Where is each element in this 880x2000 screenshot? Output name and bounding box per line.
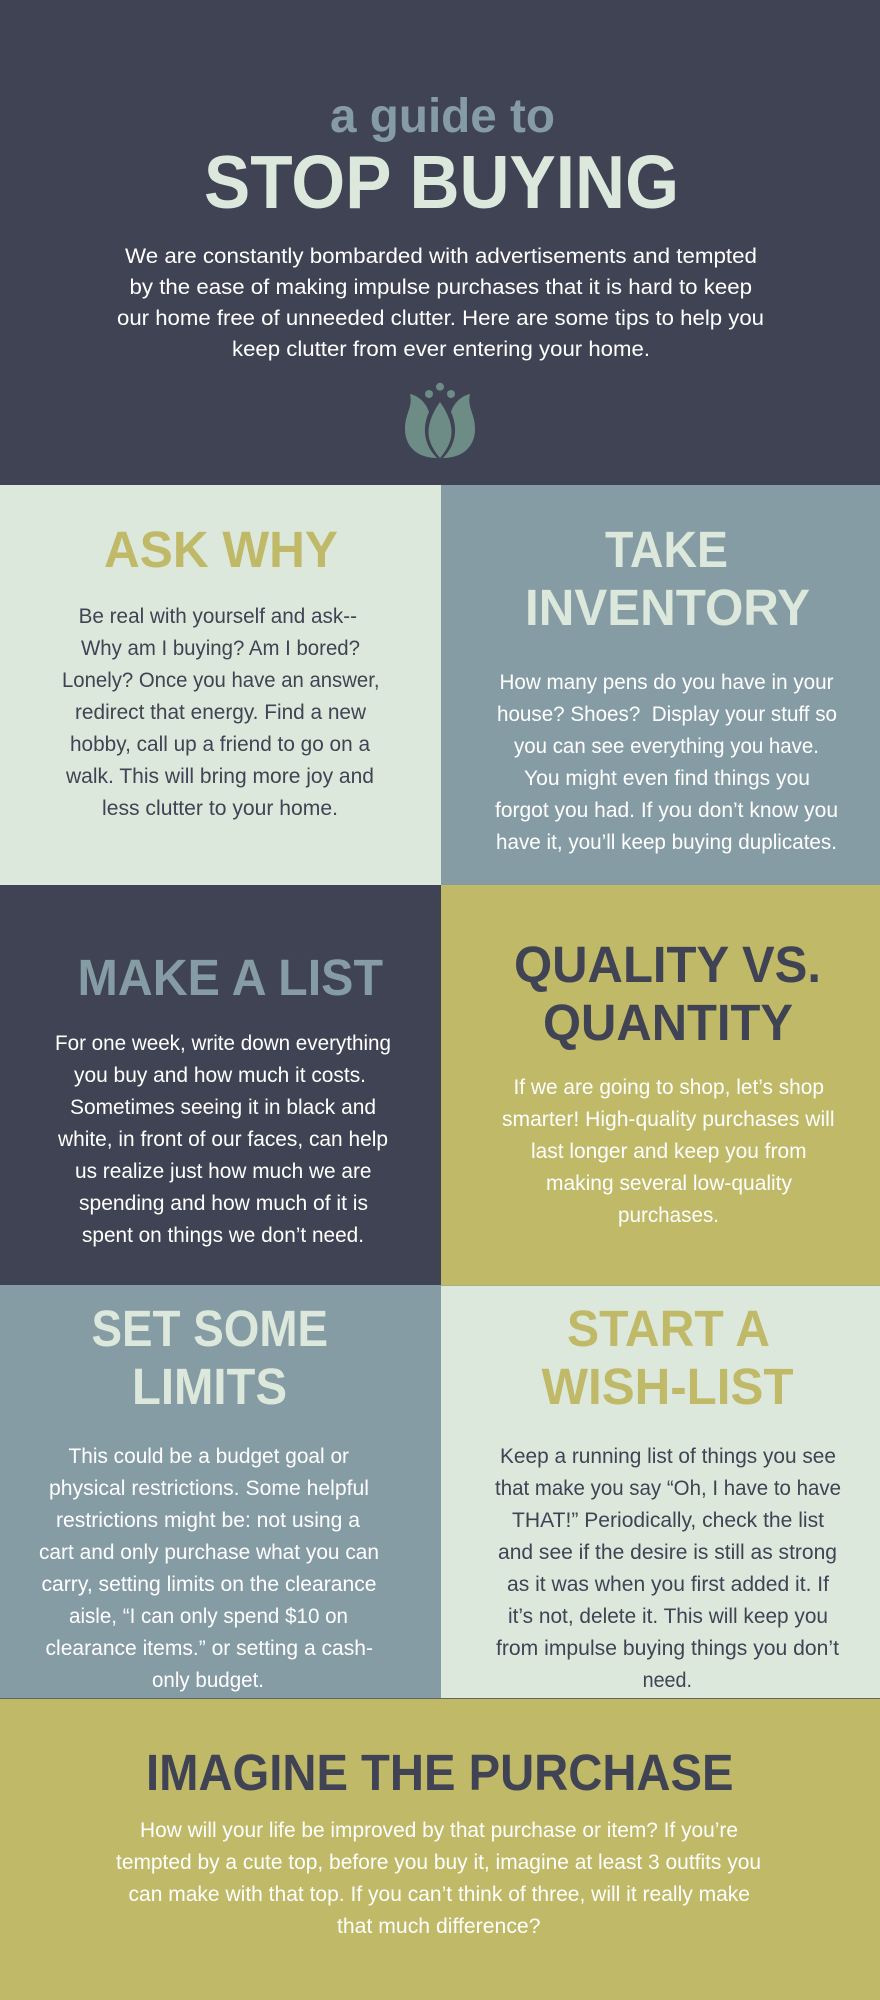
body: set some limits: aisle, “I can only spend $10 on bbox=[69, 1604, 348, 1628]
title: STOP BUYING bbox=[204, 140, 679, 224]
body: imagine the purchase: How will your life be improved by that purchase or item? If you’re bbox=[140, 1818, 738, 1842]
intro text: by the ease of making impulse purchases that it is hard to keep bbox=[130, 275, 752, 299]
heading: ask why: ASK WHY bbox=[104, 521, 338, 578]
heading: set some limits: LIMITS bbox=[132, 1358, 287, 1415]
heading: set some limits bbox=[92, 1300, 328, 1415]
heading: set some limits: SET SOME bbox=[92, 1300, 328, 1357]
body: imagine the purchase bbox=[116, 1818, 761, 1938]
body: ask why: Lonely? Once you have an answer, bbox=[62, 668, 380, 692]
body: imagine the purchase: can make with that top. If you can’t think of three, will it really make bbox=[128, 1882, 750, 1906]
body: quality vs quantity: purchases. bbox=[618, 1203, 719, 1227]
body: take inventory bbox=[495, 670, 838, 854]
body: ask why: Be real with yourself and ask-- bbox=[79, 604, 357, 628]
body: set some limits: cart and only purchase what you can bbox=[39, 1540, 379, 1564]
body: set some limits bbox=[39, 1444, 379, 1692]
body: imagine the purchase: tempted by a cute top, before you buy it, imagine at least 3 outfits you bbox=[116, 1850, 761, 1874]
body: set some limits: only budget. bbox=[152, 1668, 264, 1692]
body: quality vs quantity: smarter! High-quality purchases will bbox=[502, 1107, 834, 1131]
body: make a list: white, in front of our faces, can help bbox=[57, 1127, 388, 1151]
body: make a list: spent on things we don’t need. bbox=[82, 1223, 364, 1247]
body: make a list: us realize just how much we are bbox=[75, 1159, 372, 1183]
panel: set some limits bbox=[0, 1285, 441, 1698]
body: make a list: you buy and how much it costs. bbox=[74, 1063, 366, 1087]
panel: ask why bbox=[0, 485, 441, 885]
body: start a wish-list: as it was when you first added it. If bbox=[507, 1572, 829, 1596]
body: start a wish-list bbox=[495, 1444, 841, 1692]
body: ask why: redirect that energy. Find a new bbox=[75, 700, 366, 724]
body: set some limits: carry, setting limits on the clearance bbox=[42, 1572, 376, 1596]
body: start a wish-list: Keep a running list of things you see bbox=[500, 1444, 836, 1468]
body: quality vs quantity: If we are going to shop, let’s shop bbox=[514, 1075, 824, 1099]
body: make a list: spending and how much of it is bbox=[79, 1191, 368, 1215]
icon: tulip bbox=[405, 383, 475, 458]
heading: take inventory bbox=[525, 521, 810, 636]
body: imagine the purchase: that much difference? bbox=[337, 1914, 541, 1938]
body: start a wish-list: and see if the desire is still as strong bbox=[498, 1540, 837, 1564]
body: start a wish-list: need. bbox=[643, 1668, 692, 1692]
body: set some limits: restrictions might be: not using a bbox=[56, 1508, 360, 1532]
intro text: We are constantly bombarded with advertisements and tempted bbox=[125, 244, 757, 268]
heading: quality vs quantity bbox=[514, 936, 821, 1051]
body: take inventory: How many pens do you have in your bbox=[500, 670, 834, 694]
body: quality vs quantity: last longer and keep you from bbox=[531, 1139, 806, 1163]
heading: take inventory: TAKE bbox=[605, 521, 728, 578]
body: take inventory: have it, you’ll keep buying duplicates. bbox=[496, 830, 837, 854]
body: make a list bbox=[55, 1031, 391, 1247]
body: set some limits: clearance items.” or setting a cash- bbox=[46, 1636, 373, 1660]
body: set some limits: This could be a budget goal or bbox=[68, 1444, 349, 1468]
body: set some limits: physical restrictions. Some helpful bbox=[49, 1476, 369, 1500]
heading: start a wish-list bbox=[542, 1300, 794, 1415]
body: start a wish-list: from impulse buying things you don’t bbox=[496, 1636, 839, 1660]
body: take inventory: you can see everything you have. bbox=[514, 734, 819, 758]
body: ask why: hobby, call up a friend to go on a bbox=[70, 732, 370, 756]
body: take inventory: house? Shoes? Display your stuff so bbox=[497, 702, 837, 726]
panel: header bbox=[0, 0, 880, 485]
body: take inventory: forgot you had. If you don’t know you bbox=[495, 798, 838, 822]
body: make a list: Sometimes seeing it in black and bbox=[70, 1095, 376, 1119]
subtitle: a guide to bbox=[330, 90, 555, 143]
heading: take inventory: INVENTORY bbox=[525, 579, 810, 636]
body: ask why bbox=[62, 604, 380, 820]
panel: make a list bbox=[0, 885, 441, 1285]
body: quality vs quantity bbox=[502, 1075, 834, 1227]
body: start a wish-list: THAT!” Periodically, check the list bbox=[512, 1508, 824, 1532]
heading: start a wish-list: START A bbox=[567, 1300, 770, 1357]
body: ask why: less clutter to your home. bbox=[102, 796, 338, 820]
body: start a wish-list: it’s not, delete it. This will keep you bbox=[508, 1604, 828, 1628]
body: take inventory: You might even find things you bbox=[524, 766, 810, 790]
intro text bbox=[117, 244, 764, 361]
body: ask why: walk. This will bring more joy and bbox=[65, 764, 374, 788]
heading: quality vs quantity: QUANTITY bbox=[543, 994, 793, 1051]
heading: imagine the purchase: IMAGINE THE PURCHASE bbox=[146, 1744, 734, 1801]
body: ask why: Why am I buying? Am I bored? bbox=[81, 636, 360, 660]
heading: start a wish-list: WISH-LIST bbox=[542, 1358, 794, 1415]
intro text: keep clutter from ever entering your home. bbox=[232, 337, 650, 361]
body: quality vs quantity: making several low-quality bbox=[546, 1171, 792, 1195]
body: start a wish-list: that make you say “Oh, I have to have bbox=[495, 1476, 841, 1500]
heading: make a list: MAKE A LIST bbox=[78, 949, 383, 1006]
intro text: our home free of unneeded clutter. Here are some tips to help you bbox=[117, 306, 764, 330]
heading: quality vs quantity: QUALITY VS. bbox=[514, 936, 821, 993]
panel: imagine the purchase bbox=[0, 1698, 880, 2000]
body: make a list: For one week, write down everything bbox=[55, 1031, 391, 1055]
panel: quality vs quantity bbox=[441, 885, 880, 1286]
panel: take inventory bbox=[441, 485, 880, 886]
panel: start a wish-list bbox=[441, 1285, 880, 1698]
